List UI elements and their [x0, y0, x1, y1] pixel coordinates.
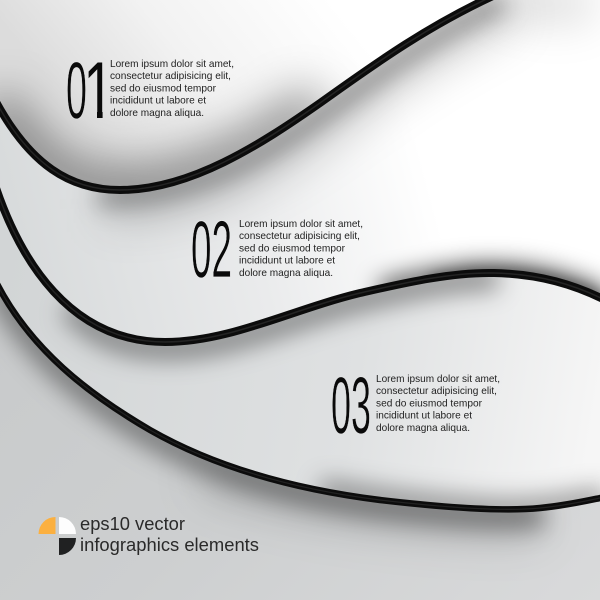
text block 03: dolore magna aliqua.: [376, 423, 470, 434]
step 03: [331, 361, 500, 451]
text block 02: dolore magna aliqua.: [239, 268, 333, 279]
step 01: [68, 60, 234, 120]
step 01: 0: [66, 46, 87, 136]
text block 02: incididunt ut labore et: [239, 256, 335, 267]
text block 02: consectetur adipisicing elit,: [239, 231, 360, 242]
text block 02: sed do eiusmod tempor: [239, 243, 346, 254]
text block 01: sed do eiusmod tempor: [110, 83, 217, 94]
step 02: 02: [191, 205, 232, 295]
text block 03: incididunt ut labore et: [376, 411, 472, 422]
step 02: [191, 205, 363, 295]
text block 01: consectetur adipisicing elit,: [110, 71, 231, 82]
cable 2: [0, 185, 600, 342]
step 03: 03: [331, 361, 371, 451]
text block 03: consectetur adipisicing elit,: [376, 386, 497, 397]
text block 01: Lorem ipsum dolor sit amet,: [110, 59, 234, 70]
number 01: digit 1: 1: [83, 46, 114, 136]
text block 02: Lorem ipsum dolor sit amet,: [239, 219, 363, 230]
caption: [80, 513, 259, 555]
panel: middle section: [0, 0, 600, 350]
caption: eps10 vector: [80, 513, 185, 534]
cable 3: [0, 280, 600, 509]
panel: lower section: [0, 211, 600, 506]
text block 01: dolore magna aliqua.: [110, 108, 204, 119]
caption: infographics elements: [80, 534, 259, 555]
text block 03: sed do eiusmod tempor: [376, 398, 483, 409]
background panel: [0, 296, 600, 600]
panel: top section: [0, 0, 475, 186]
text block 03: Lorem ipsum dolor sit amet,: [376, 374, 500, 385]
cable 1: [0, 0, 495, 190]
icon: quarter circles logo: [38, 517, 76, 555]
text block 01: incididunt ut labore et: [110, 96, 206, 107]
